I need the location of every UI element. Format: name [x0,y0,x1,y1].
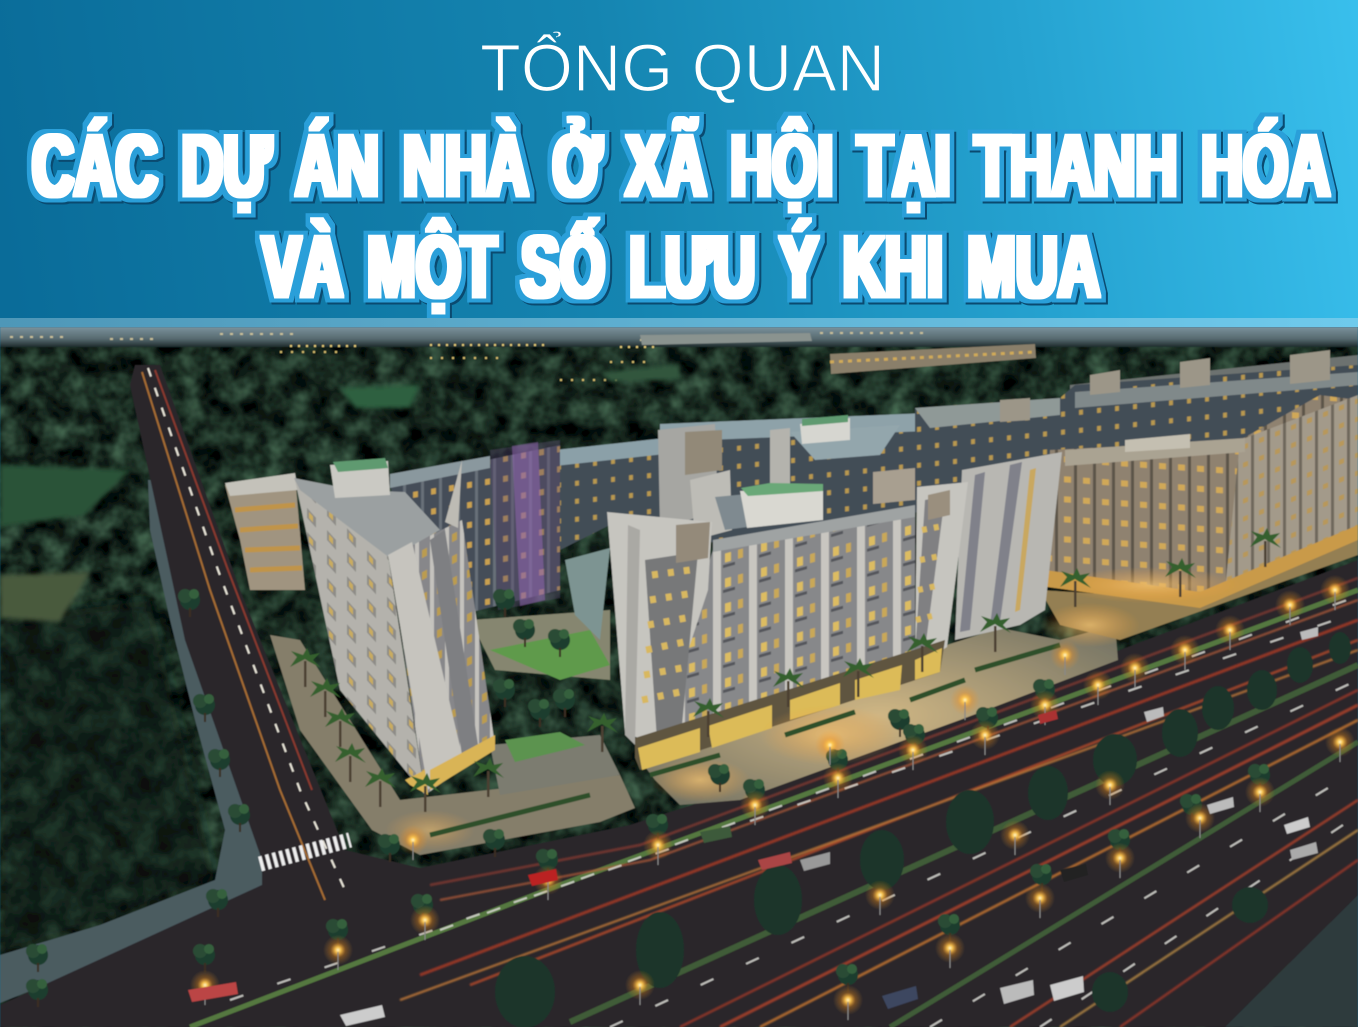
left wing [607,512,712,745]
forest texture [0,340,1358,1027]
title: TỔNG QUAN: TỔNG QUAN [480,31,885,106]
crosswalk [260,840,350,864]
darker forest mass on the left [0,600,215,955]
road centre markings and left road trails [142,368,345,900]
front building facade [607,482,968,770]
warm light pools [385,567,1240,850]
courtyard and roadside trees [178,528,1281,917]
lawns on the left [0,364,680,622]
far roofs and rear terrace houses [555,410,1000,550]
lit pavements [270,530,1358,855]
median strips [190,590,1358,1027]
asphalt roads [0,365,1358,1027]
median small trees [26,679,1270,1007]
bottom right corner [1225,895,1358,1027]
rear central block with purple light [390,440,560,620]
header background [0,0,1358,318]
villa block on left [225,473,305,590]
front building rear wings [658,415,915,540]
lane dashes [230,596,1358,1027]
roof box [740,487,823,528]
big median trees [495,632,1351,1027]
right complex: far block [915,350,1358,520]
heading: line 1 and 2 [32,116,1330,316]
cars [188,627,1318,1026]
right complex: main block [1040,395,1358,608]
street lamps [190,575,1355,1020]
photo: aerial night view of the housing project [0,327,1358,1027]
right wing [915,482,968,668]
hedges [430,645,1060,835]
ground floor shops [635,640,945,770]
middle white block [955,452,1062,640]
far town rows and distant lights [280,333,1358,405]
light trails on main road [400,578,1358,1027]
left building [294,458,495,795]
courtyard [470,548,610,762]
light blue divider band [0,318,1358,327]
left sidewalk [0,480,262,1003]
hazy horizon [0,327,1358,347]
